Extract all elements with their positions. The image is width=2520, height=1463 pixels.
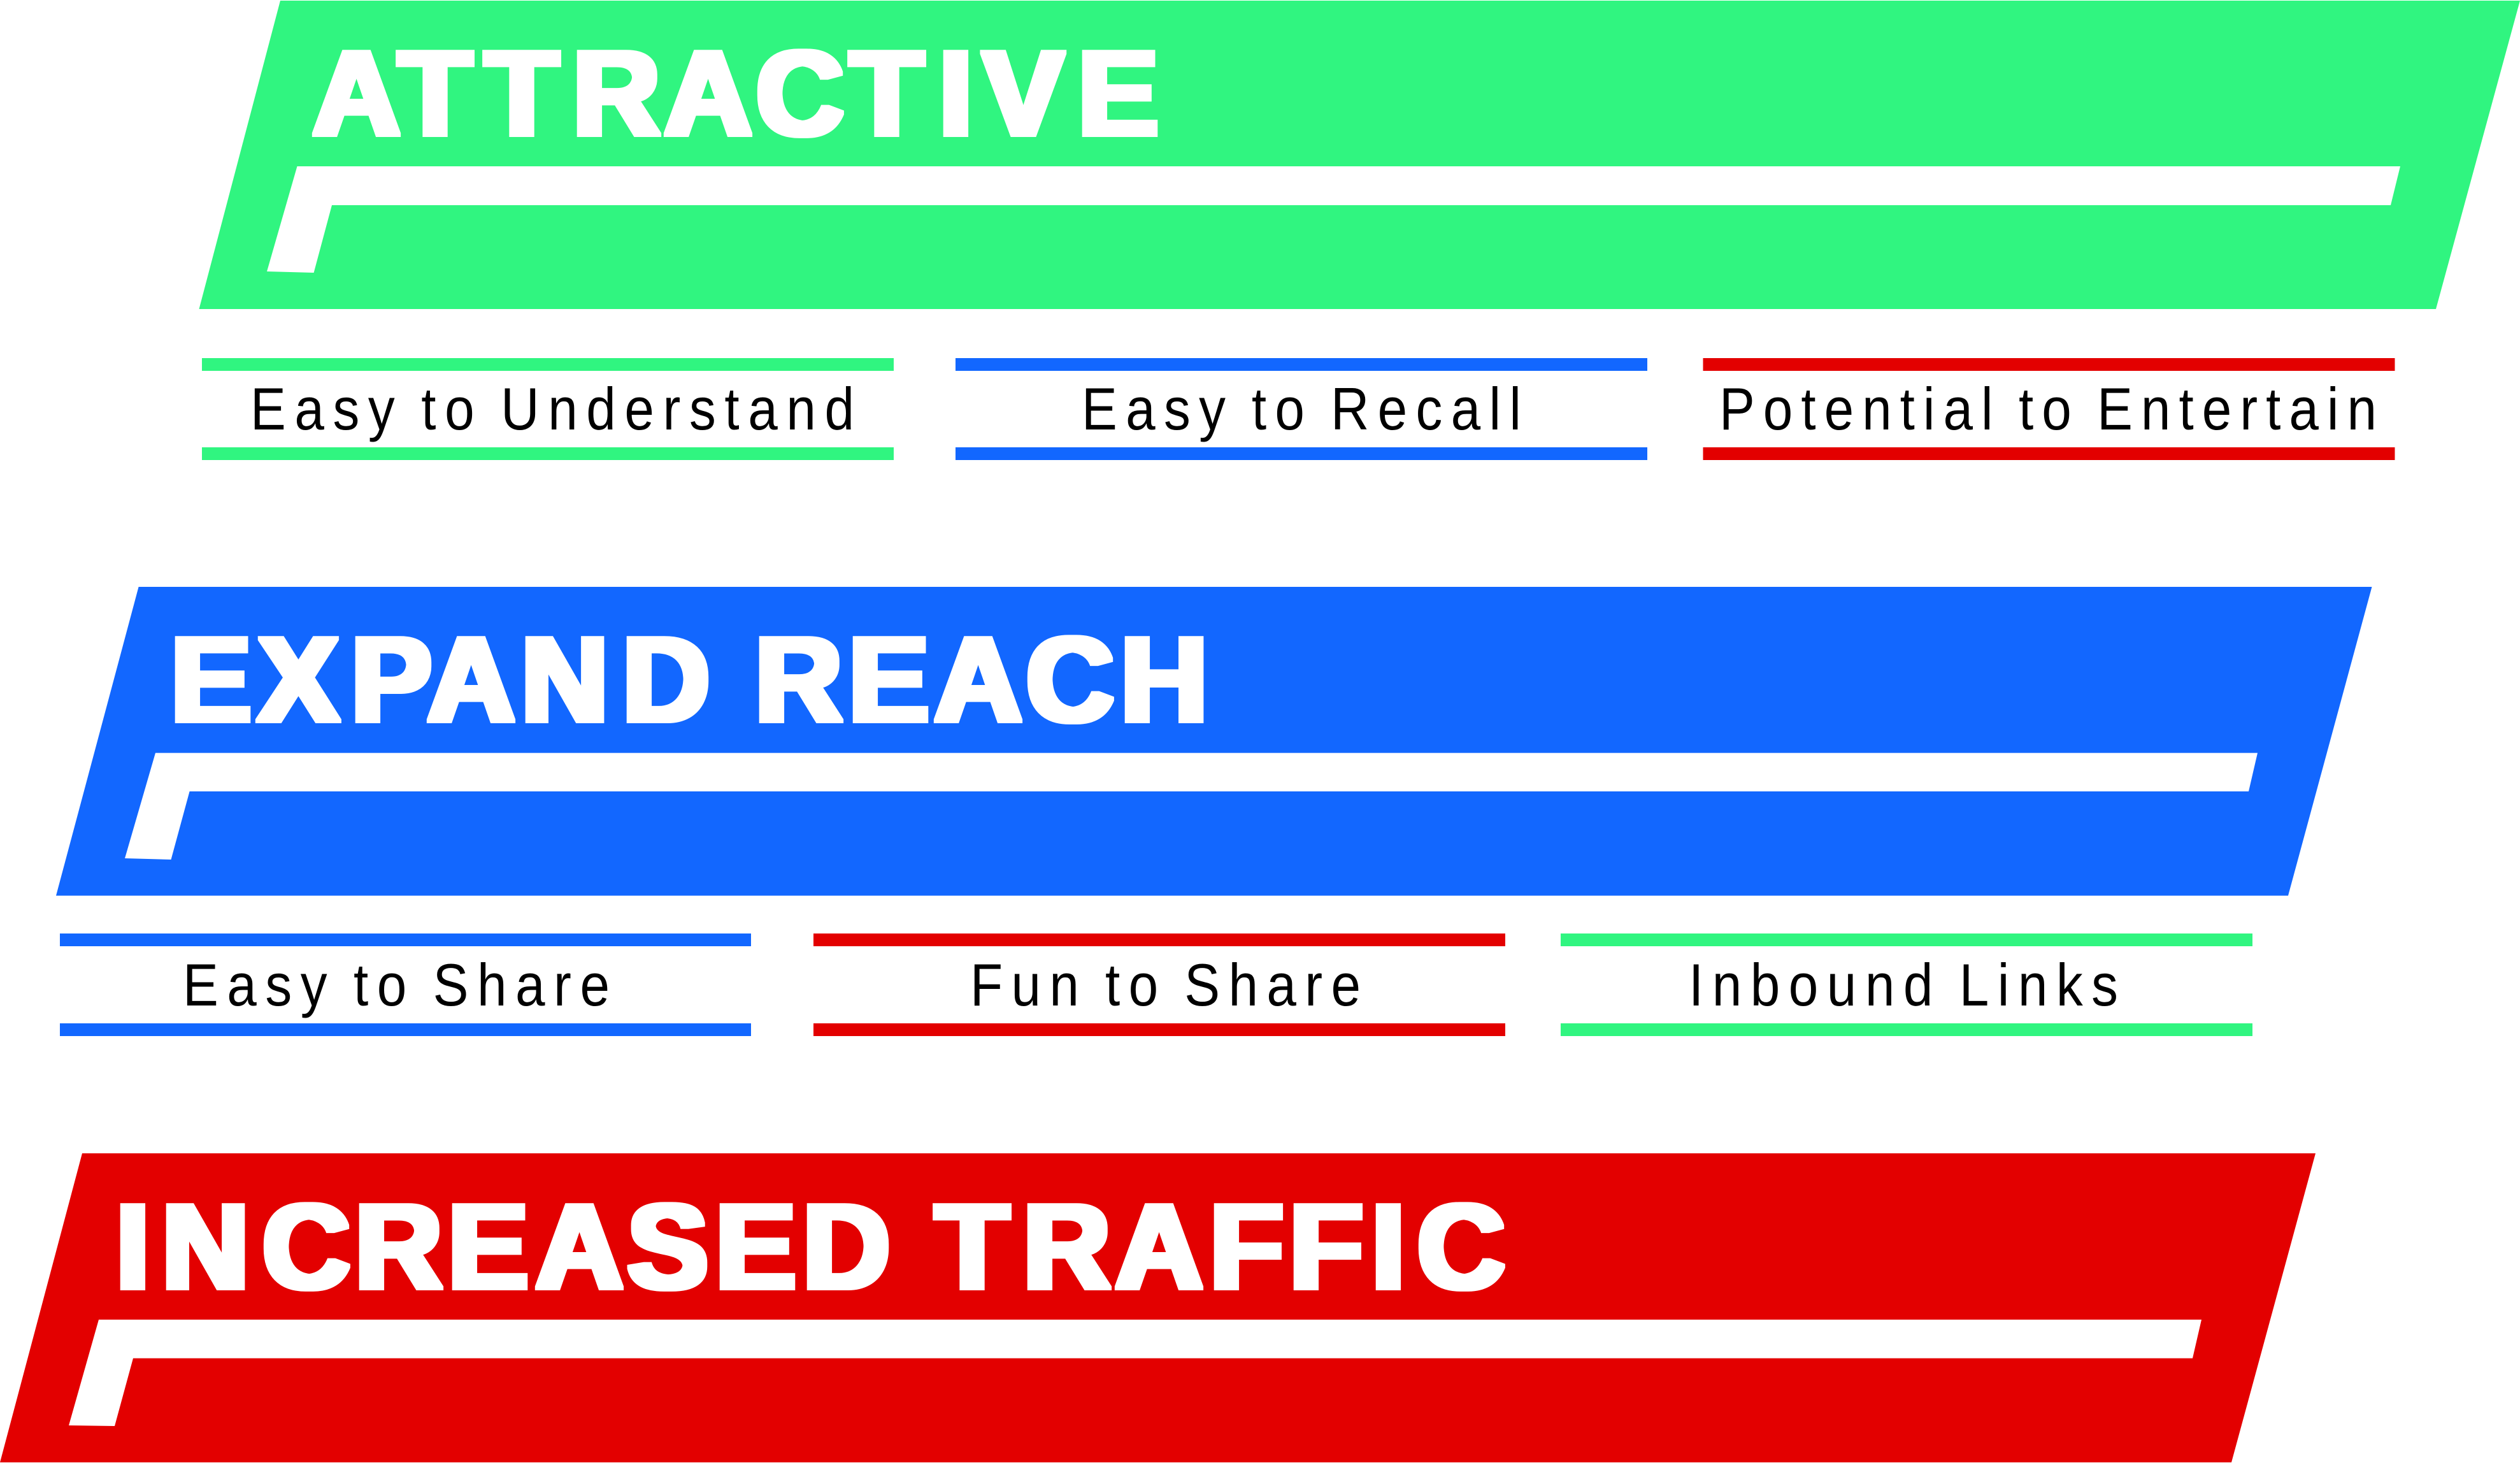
label: easy to recall: Easy to Recall: [1082, 375, 1521, 442]
white bracket stripe: [125, 753, 2258, 860]
label: fun to share: Fun to Share: [970, 951, 1361, 1018]
panel: expand reach banner: [56, 587, 2372, 896]
heading: increased traffic: INCREASED TRAFFIC: [116, 1179, 1505, 1315]
panel: increased traffic banner: [0, 1153, 2316, 1462]
banner shape: green parallelogram: [199, 1, 2520, 309]
label: easy to recall: [956, 358, 1647, 460]
banner shape: blue parallelogram: [56, 587, 2372, 896]
label: potential to entertain: [1703, 358, 2395, 460]
label: potential to entertain: Potential to Entertain: [1719, 375, 2377, 442]
white bracket stripe: [69, 1320, 2201, 1426]
label: easy to share: Easy to Share: [183, 951, 610, 1018]
label: easy to share: [60, 933, 751, 1036]
label: inbound links: [1561, 933, 2252, 1036]
label: easy to understand: Easy to Understand: [250, 375, 854, 442]
label: inbound links: Inbound Links: [1689, 951, 2118, 1018]
label: easy to understand: [202, 358, 894, 460]
heading: attractive: ATTRACTIVE: [313, 26, 1159, 161]
banner shape: red parallelogram: [0, 1153, 2316, 1462]
heading: expand reach: EXPAND REACH: [171, 612, 1208, 747]
label: fun to share: [813, 933, 1505, 1036]
panel: attractive banner: [199, 1, 2520, 309]
white bracket stripe: [267, 166, 2400, 273]
